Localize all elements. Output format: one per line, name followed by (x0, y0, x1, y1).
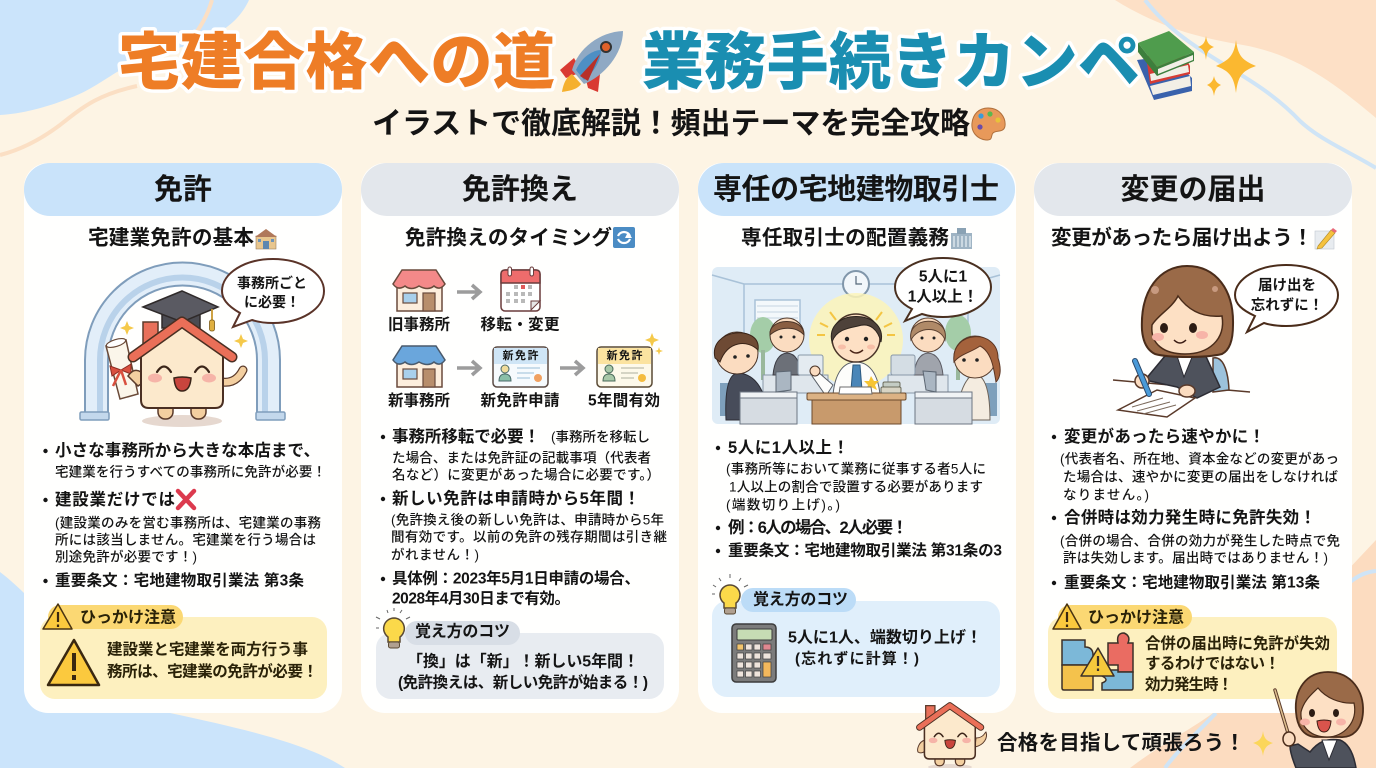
bullet list: (合併の場合、合併の効力が発生した時点で免 (1060, 532, 1340, 548)
heading: 専任の宅地建物取引士: 専任の宅地建物取引士 (713, 173, 999, 206)
bullet list: 事務所移転で必要！ (392, 427, 540, 446)
callout: 覚え方のコツ: 5人に1人、端数切り上げ！ (788, 628, 982, 646)
speech bubble (222, 259, 324, 327)
title: 業務手続きカンペ (642, 28, 1140, 98)
bullet list (381, 427, 668, 608)
speech bubble: 1人以上！ (908, 288, 978, 306)
speech bubble (1235, 265, 1338, 332)
callout: ひっかけ注意: 務所は、宅建業の免許が必要！ (107, 662, 318, 680)
icon: puzzle (1062, 633, 1133, 690)
new license application: 新免許申請 (480, 390, 560, 410)
arrow (560, 361, 583, 375)
bullet list: 別途免許が必要です！) (55, 548, 197, 564)
illustration: woman filling a form (1113, 265, 1338, 417)
glow (809, 293, 903, 387)
callout: 覚え方のコツ: 「換」は「新」！新しい5年間！ (407, 652, 639, 670)
bullet list: 名など）に変更があった場合に必要です。） (392, 466, 660, 482)
bullet list: 合併時は効力発生時に免許失効！ (1064, 507, 1316, 527)
bullet list: た場合、または免許証の記載事項（代表者 (392, 450, 651, 466)
icon: sparkle (1253, 731, 1273, 756)
icon: palette (972, 108, 1005, 140)
icon: calculator (732, 624, 776, 682)
bullet list: (端数切り上げ)。) (726, 498, 840, 512)
icon: large warning (48, 640, 99, 685)
central manager (807, 314, 906, 424)
subheading: 専任取引士の配置義務 (741, 226, 949, 250)
clock (843, 271, 869, 297)
back right worker (891, 318, 945, 375)
subheading: 免許換えのタイミング (405, 226, 612, 250)
icon: small warning (1053, 604, 1081, 629)
bullet list: 建設業だけでは (55, 490, 175, 509)
heading: 専任の宅地建物取引士 (698, 163, 1015, 216)
bullet list: た場合は、速やかに変更の届出をしなければ (1063, 468, 1338, 484)
bullet list (1052, 426, 1340, 592)
icon: office building (951, 228, 972, 249)
callout: ひっかけ注意 (40, 604, 327, 699)
bullet list: 重要条文：宅地建物取引業法 第3条 (55, 570, 304, 590)
valid five years: 5年間有効 (588, 390, 660, 410)
callout: ひっかけ注意: 合併の届出時に免許が失効 (1145, 634, 1330, 652)
bullet list: 2028年4月30日まで有効。 (392, 588, 570, 608)
speech bubble (895, 258, 991, 321)
heading: 変更の届出: 変更の届出 (1120, 173, 1266, 206)
panel: 専任の宅地建物取引士 (698, 163, 1016, 713)
callout: 覚え方のコツ: (忘れずに計算！) (795, 650, 919, 668)
bullet list: なりません。) (1063, 488, 1149, 502)
arrow (457, 285, 480, 299)
panel: 変更の届出 (1034, 163, 1352, 713)
title: 宅建合格への道 (118, 28, 555, 98)
new office: 新事務所 (388, 390, 450, 410)
title (118, 28, 1256, 100)
speech bubble: に必要！ (244, 294, 300, 310)
callout: ひっかけ注意 (1048, 604, 1337, 699)
bullet list: (免許換え後の新しい免許は、申請時から5年 (391, 512, 664, 528)
callout: ひっかけ注意: するわけではない！ (1145, 654, 1280, 672)
bullet list (716, 438, 1002, 560)
speech bubble: 事務所ごと (237, 275, 307, 291)
subtitle: イラストで徹底解説！頻出テーマを完全攻略 (372, 108, 970, 140)
icon: cross mark (178, 491, 194, 508)
bullet list: 重要条文：宅地建物取引業法 第13条 (1064, 572, 1320, 592)
front left worker (714, 332, 797, 424)
valid five years: 新免許 (606, 348, 642, 362)
callout: 覚え方のコツ: 覚え方のコツ (753, 590, 848, 608)
bullet list: 許は失効します。届出時ではありません！) (1063, 550, 1328, 566)
callout: 覚え方のコツ: 覚え方のコツ (415, 622, 510, 640)
callout: ひっかけ注意: ひっかけ注意 (1088, 608, 1184, 626)
subheading: 宅建業免許の基本 (88, 226, 254, 250)
back desks (763, 375, 828, 393)
calendar (480, 267, 560, 334)
graduation cap (143, 291, 218, 331)
bullet list: (事務所を移転し (551, 428, 650, 444)
callout: ひっかけ注意: 効力発生時！ (1145, 676, 1233, 694)
new license application (480, 347, 560, 410)
bullet list: 宅建業を行うすべての事務所に免許が必要！ (55, 464, 326, 480)
diagram: relocation flow (388, 267, 663, 410)
icon: light bulb (376, 608, 410, 648)
icon: rocket (560, 31, 623, 92)
callout: 覚え方のコツ: (免許換えは、新しい免許が始まる！) (398, 672, 648, 692)
old office: 旧事務所 (388, 314, 450, 334)
new office (388, 346, 450, 410)
heading: 免許 (24, 163, 342, 216)
illustration: house mascot under arch (80, 259, 324, 427)
footer message (918, 672, 1363, 768)
bullet list: 重要条文：宅地建物取引業法 第31条の3 (728, 540, 1002, 560)
old office (388, 270, 450, 334)
footer message: 合格を目指して頑張ろう！ (997, 732, 1245, 754)
heading: 変更の届出 (1034, 163, 1352, 216)
valid five years (588, 333, 663, 410)
bullet list: 間有効です。以前の免許の残存期間は引き継 (391, 528, 668, 544)
heading: 免許: 免許 (154, 173, 212, 206)
speech bubble: 忘れずに！ (1251, 297, 1323, 314)
new license application: 新免許 (502, 348, 538, 362)
icon: small warning (43, 604, 72, 629)
speech bubble: 届け出を (1258, 277, 1316, 294)
speech bubble: 5人に1 (919, 268, 967, 286)
bullet list: (事務所等において業務に従事する者5人に (726, 460, 986, 476)
illustration: office scene (712, 258, 1000, 424)
back left worker (770, 318, 823, 375)
scroll (105, 337, 138, 399)
illustration: teacher with pointer (1275, 672, 1363, 768)
bullet list (43, 441, 326, 590)
icon: school (255, 229, 277, 249)
icon: sparkles (1198, 36, 1256, 96)
bullet list: (代表者名、所在地、資本金などの変更があっ (1060, 450, 1339, 466)
arrow (457, 361, 480, 375)
front right worker (915, 336, 1000, 424)
bullet list: 変更があったら速やかに！ (1064, 426, 1265, 446)
bullet list: がれません！) (391, 546, 479, 562)
bullet list: 小さな事務所から大きな本店まで、 (55, 441, 320, 460)
heading: 免許換え (361, 163, 679, 216)
panel: 免許 (24, 163, 342, 713)
bullet list: (建設業のみを営む事務所は、宅建業の事務 (55, 516, 322, 530)
bullet list: 新しい免許は申請時から5年間！ (392, 488, 640, 508)
bullet list: 所には該当しません。宅建業を行う場合は (55, 532, 316, 548)
heading: 免許換え: 免許換え (462, 173, 578, 206)
bullet list: 例：6人の場合、2人必要！ (728, 518, 908, 537)
callout: 覚え方のコツ (712, 574, 1000, 697)
icon: books (1137, 31, 1194, 100)
callout: ひっかけ注意: ひっかけ注意 (80, 608, 176, 626)
icon: house mascot (918, 706, 987, 768)
bullet list: 1人以上の割合で設置する必要があります (729, 478, 983, 494)
subheading: 変更があったら届け出よう！ (1051, 226, 1313, 250)
bullet list: 具体例：2023年5月1日申請の場合、 (392, 568, 640, 588)
callout: 覚え方のコツ (376, 608, 664, 699)
house (133, 322, 232, 419)
icon: refresh (613, 227, 635, 248)
icon: memo (1315, 228, 1337, 249)
calendar: 移転・変更 (480, 314, 560, 334)
icon: light bulb (712, 574, 748, 614)
callout: ひっかけ注意: 建設業と宅建業を両方行う事 (107, 640, 308, 658)
panel: 免許換え (361, 163, 679, 713)
bullet list: 5人に1人以上！ (728, 438, 849, 457)
